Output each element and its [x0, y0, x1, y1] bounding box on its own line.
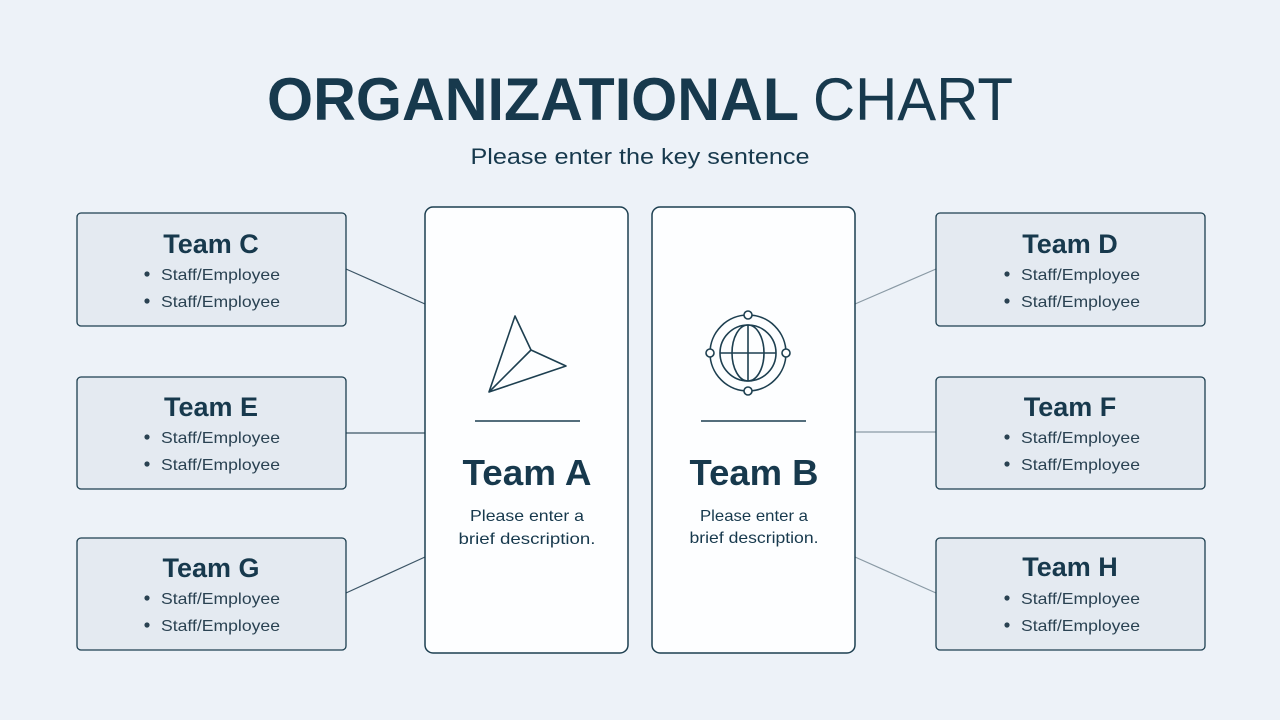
panel: Team A: brief description. — [458, 531, 596, 548]
panel: Team F: Team F — [1024, 392, 1116, 422]
panel: Team H — [936, 538, 1205, 650]
panel: Team C: Team C — [163, 229, 259, 259]
panel: Team G: Staff/Employee — [161, 591, 280, 608]
panel: Team G — [77, 538, 346, 650]
panel: Team E: Staff/Employee — [161, 430, 280, 447]
icon: globe — [706, 311, 790, 395]
panel: Team D: Team D — [1022, 229, 1118, 259]
panel: Team H: Staff/Employee — [1021, 591, 1140, 608]
panel: Team B: Team B — [690, 452, 818, 493]
panel: Team F — [936, 377, 1205, 489]
panel: Team F: Staff/Employee — [1021, 430, 1140, 447]
panel: Team B: Please enter a — [700, 508, 808, 525]
panel: Team D: Staff/Employee — [1021, 294, 1140, 311]
panel: Team G: Staff/Employee — [161, 618, 280, 635]
panel: Team D — [936, 213, 1205, 326]
panel: Team C: Staff/Employee — [161, 294, 280, 311]
panel: Team B: brief description. — [690, 530, 818, 547]
panel: Team B — [652, 207, 855, 653]
panel: Team C — [77, 213, 346, 326]
panel: Team E: Team E — [164, 392, 258, 422]
subtitle: Please enter the key sentence — [470, 144, 810, 169]
panel: Team E: Staff/Employee — [161, 457, 280, 474]
panel: Team A: Team A — [462, 452, 592, 493]
panel: Team E — [77, 377, 346, 489]
panel: Team A: Please enter a — [470, 508, 584, 525]
panel: Team C: Staff/Employee — [161, 267, 280, 284]
panel: Team H: Staff/Employee — [1021, 618, 1140, 635]
title: ORGANIZATIONALCHART — [267, 66, 1013, 133]
connector lines — [346, 269, 936, 593]
icon: paper plane — [489, 316, 566, 392]
panel: Team D: Staff/Employee — [1021, 267, 1140, 284]
panel: Team F: Staff/Employee — [1021, 457, 1140, 474]
panel: Team H: Team H — [1022, 552, 1118, 582]
panel: Team A — [425, 207, 628, 653]
panel: Team G: Team G — [162, 553, 260, 583]
